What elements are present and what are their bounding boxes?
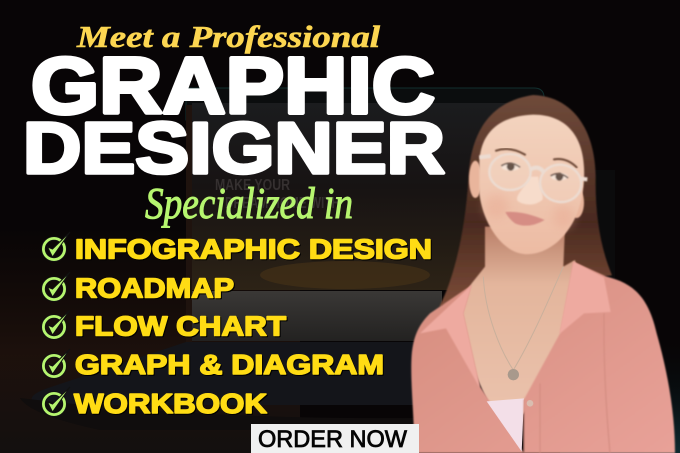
button	[527, 400, 533, 407]
glasses	[479, 154, 587, 205]
face	[479, 115, 584, 254]
ears	[469, 161, 584, 218]
shirt	[411, 262, 675, 453]
collars	[420, 262, 611, 388]
list item: flow chart: FLOW CHART	[75, 310, 286, 342]
call to action: order now: ORDER NOW	[258, 426, 407, 453]
cheek shading	[484, 195, 574, 228]
eyebrows	[496, 149, 577, 167]
list item: workbook: WORKBOOK	[74, 388, 267, 419]
lips	[505, 212, 545, 226]
title: DESIGNER	[23, 109, 445, 189]
neck and chest	[457, 227, 587, 430]
laptop mockup in background	[20, 88, 615, 430]
laptop screen faint headline: MAKE YOUR	[215, 177, 290, 194]
shirt placket	[524, 313, 610, 453]
nose	[517, 177, 543, 205]
list item: infographic design: INFOGRAPHIC DESIGN	[75, 234, 432, 264]
tagline: Meet a Professional: Meet a Professional	[76, 19, 380, 54]
necklace	[483, 267, 563, 380]
list item: graph and diagram: GRAPH & DIAGRAM	[75, 349, 384, 380]
white top	[487, 398, 524, 452]
specialization list	[43, 232, 432, 419]
title	[23, 41, 445, 189]
eyes	[501, 163, 568, 181]
hair	[439, 95, 612, 307]
laptop screen faint headline	[215, 177, 340, 212]
portrait of woman	[411, 95, 675, 453]
list item: roadmap: ROADMAP	[75, 272, 234, 304]
title: GRAPHIC	[31, 41, 435, 130]
subheading: Specialized in: Specialized in	[145, 179, 353, 228]
laptop screen faint headline: DREAM HOME WITH	[225, 195, 340, 212]
